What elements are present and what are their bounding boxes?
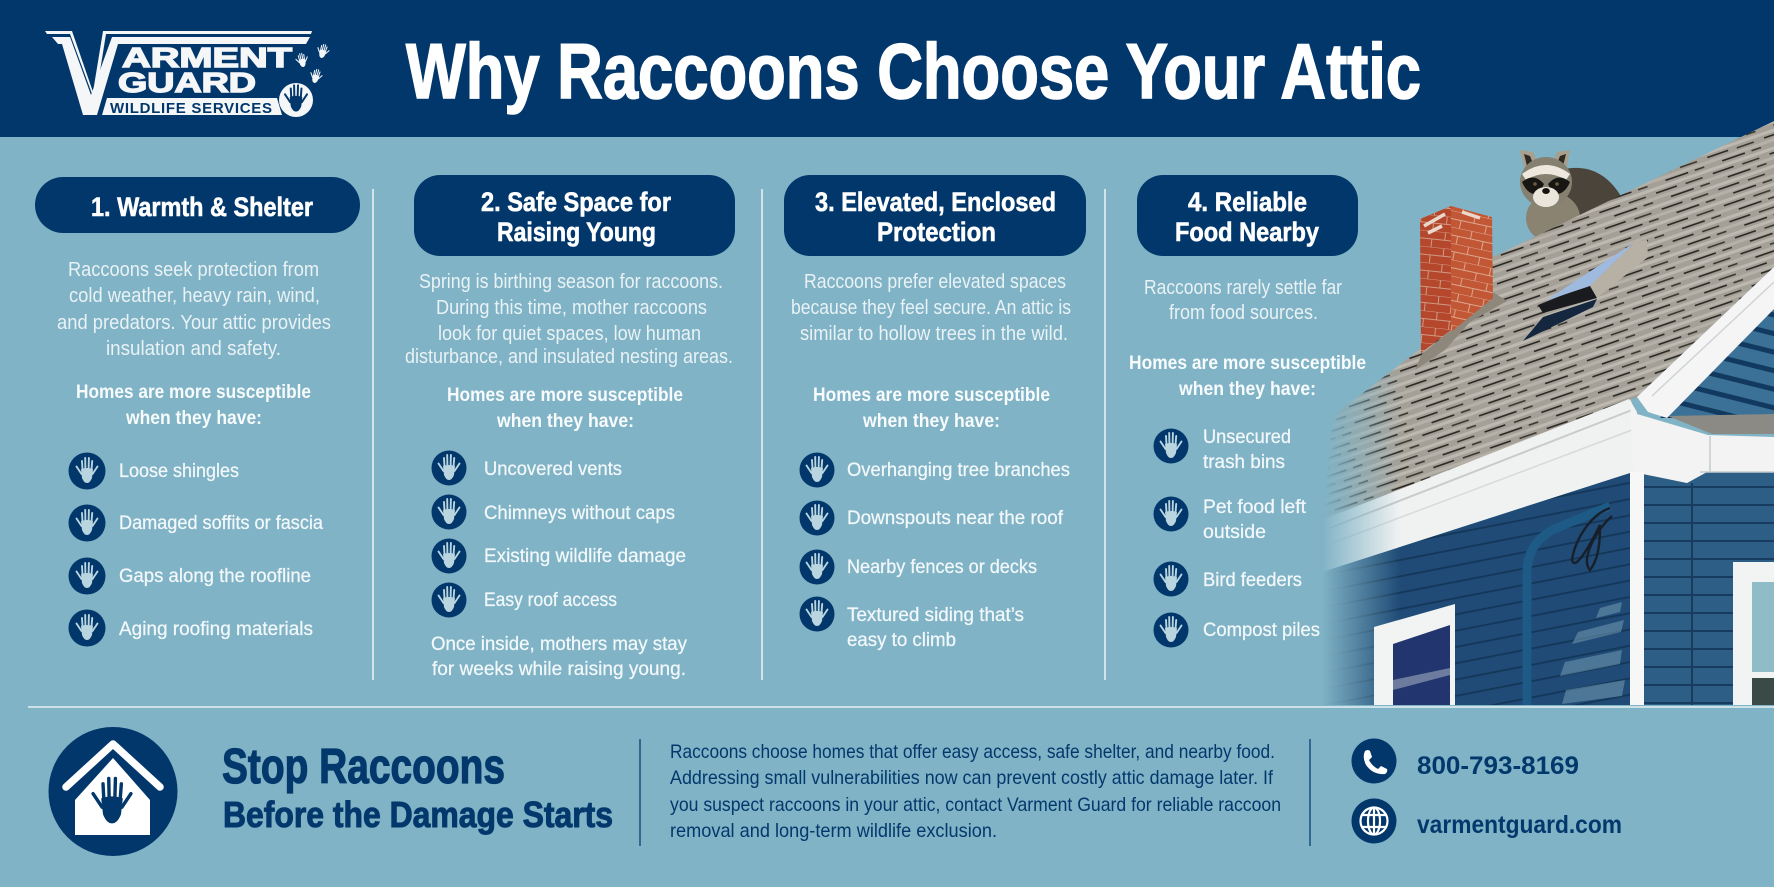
subheading 2: when they have: [496, 411, 634, 432]
contact: phone: 800-793-8169 [1417, 752, 1579, 780]
list 3 [800, 452, 1070, 651]
right window [1733, 562, 1774, 705]
soffit return [1630, 399, 1774, 483]
skylight [1523, 240, 1648, 341]
subheading 1 [76, 382, 311, 429]
panel: safe space [405, 175, 735, 680]
contact: phone [1352, 738, 1579, 784]
list 2: Existing wildlife damage [484, 546, 686, 567]
icon: house with paw [48, 727, 178, 856]
tangled wire [1572, 508, 1612, 570]
heading pill 2: 2. Safe Space for [481, 187, 671, 217]
heading pill 4: Food Nearby [1175, 217, 1319, 247]
eave trim [1322, 399, 1637, 572]
heading pill 2 [414, 175, 735, 256]
subheading 1: when they have: [125, 408, 262, 429]
list 4: trash bins [1203, 452, 1285, 473]
subheading 2 [447, 385, 683, 432]
downspout [1527, 506, 1610, 705]
body text 2: Spring is birthing season for raccoons. [419, 271, 723, 293]
body text 1 [57, 259, 331, 360]
list 4: Pet food left [1203, 497, 1307, 518]
logo: Varment Guard Wildlife Services: GUARD [118, 67, 256, 98]
list 3: Nearby fences or decks [847, 557, 1037, 578]
closing note 2 [431, 634, 687, 680]
subheading 3: when they have: [862, 411, 1000, 432]
panel: warmth and shelter [35, 177, 360, 646]
right wall siding [1633, 472, 1774, 705]
body text 2 [405, 271, 733, 368]
list 1: Gaps along the roofline [119, 566, 311, 587]
body text 4 [1144, 277, 1342, 324]
heading pill 3: Protection [877, 217, 996, 247]
heading pill 4 [1137, 175, 1358, 256]
subheading 4: Homes are more susceptible [1129, 353, 1366, 374]
body text 2: During this time, mother raccoons [436, 297, 707, 319]
subheading 4: when they have: [1178, 379, 1316, 400]
heading pill 1 [35, 177, 360, 233]
siding light stripes [1560, 602, 1625, 704]
chimney flashing [1415, 292, 1507, 370]
contact: website: varmentguard.com [1417, 811, 1622, 839]
list 3: Overhanging tree branches [847, 460, 1070, 481]
list 3: easy to climb [847, 630, 956, 651]
roof [1322, 121, 1774, 520]
gable siding [1660, 300, 1774, 418]
lower roof [1668, 414, 1774, 434]
title: Why Raccoons Choose Your Attic [406, 27, 1421, 115]
body text 2: look for quiet spaces, low human [438, 323, 701, 345]
list 1: Aging roofing materials [119, 619, 313, 640]
footer band [48, 727, 1622, 856]
subheading 3: Homes are more susceptible [813, 385, 1050, 406]
body text 4: from food sources. [1169, 302, 1318, 324]
list 4: Bird feeders [1203, 570, 1302, 591]
heading pill 1: 1. Warmth & Shelter [91, 192, 313, 222]
heading pill 3: 3. Elevated, Enclosed [815, 187, 1056, 217]
closing note 2: for weeks while raising young. [432, 659, 686, 680]
list 4: outside [1203, 522, 1266, 543]
summary paragraph: removal and long-term wildlife exclusion. [670, 820, 997, 842]
logo: Varment Guard Wildlife Services: ARMENT [122, 42, 292, 73]
list 1: Loose shingles [119, 461, 239, 482]
logo: Varment Guard Wildlife Services: WILDLIFE SERVICES [110, 100, 272, 117]
body text 2: disturbance, and insulated nesting areas. [405, 346, 733, 368]
list 1: Damaged soffits or fascia [119, 513, 323, 534]
left window [1374, 604, 1455, 705]
gable rafter trim [1637, 267, 1774, 418]
subheading 2: Homes are more susceptible [447, 385, 683, 406]
corner board [1630, 472, 1644, 705]
closing note 2: Once inside, mothers may stay [431, 634, 687, 655]
panel: food nearby [1137, 175, 1358, 324]
summary paragraph [670, 741, 1281, 842]
list 4 [1154, 427, 1320, 648]
call to action heading: Before the Damage Starts [223, 794, 613, 835]
body text 1: Raccoons seek protection from [68, 259, 319, 281]
call to action heading: Stop Raccoons [222, 740, 505, 794]
subheading 4 [1129, 353, 1366, 400]
list 4: Compost piles [1203, 620, 1320, 641]
subheading 3 [813, 385, 1050, 432]
list 2: Easy roof access [484, 590, 617, 611]
call to action heading [222, 740, 613, 835]
raccoon [1520, 150, 1622, 243]
summary paragraph: Addressing small vulnerabilities now can prevent costly attic damage later. If [670, 767, 1274, 789]
list 3: Textured siding that’s [847, 605, 1024, 626]
chimney [1420, 206, 1493, 353]
heading pill 3 [784, 175, 1086, 256]
list 1 [68, 452, 323, 646]
logo: Varment Guard Wildlife Services [45, 31, 330, 117]
body text 3: Raccoons prefer elevated spaces [804, 271, 1066, 293]
contact: website [1352, 798, 1622, 844]
body text 3 [791, 271, 1071, 345]
list 3: Downspouts near the roof [847, 508, 1064, 529]
left wall siding [1322, 472, 1633, 705]
heading pill 2: Raising Young [497, 217, 656, 247]
panel 4 lower content over the house fade [1129, 353, 1366, 648]
dividers [28, 189, 1774, 707]
list 2: Chimneys without caps [484, 503, 675, 524]
illustration: house with raccoon on roof [1322, 121, 1774, 705]
summary paragraph: Raccoons choose homes that offer easy access, safe shelter, and nearby food. [670, 741, 1275, 763]
summary paragraph: you suspect raccoons in your attic, contact Varment Guard for reliable raccoon [670, 794, 1281, 816]
body text 1: and predators. Your attic provides [57, 312, 331, 334]
list 2: Uncovered vents [484, 459, 622, 480]
house body [1322, 121, 1774, 705]
body text 3: similar to hollow trees in the wild. [800, 323, 1068, 345]
body text 1: insulation and safety. [106, 338, 281, 360]
body text 3: because they feel secure. An attic is [791, 297, 1071, 319]
body text 1: cold weather, heavy rain, wind, [69, 285, 320, 307]
body text 4: Raccoons rarely settle far [1144, 277, 1342, 299]
list 2 [432, 450, 686, 618]
subheading 1: Homes are more susceptible [76, 382, 311, 403]
panel: elevated protection [784, 175, 1086, 651]
heading pill 4: 4. Reliable [1188, 187, 1307, 217]
header band [0, 0, 1774, 137]
list 4: Unsecured [1203, 427, 1291, 448]
